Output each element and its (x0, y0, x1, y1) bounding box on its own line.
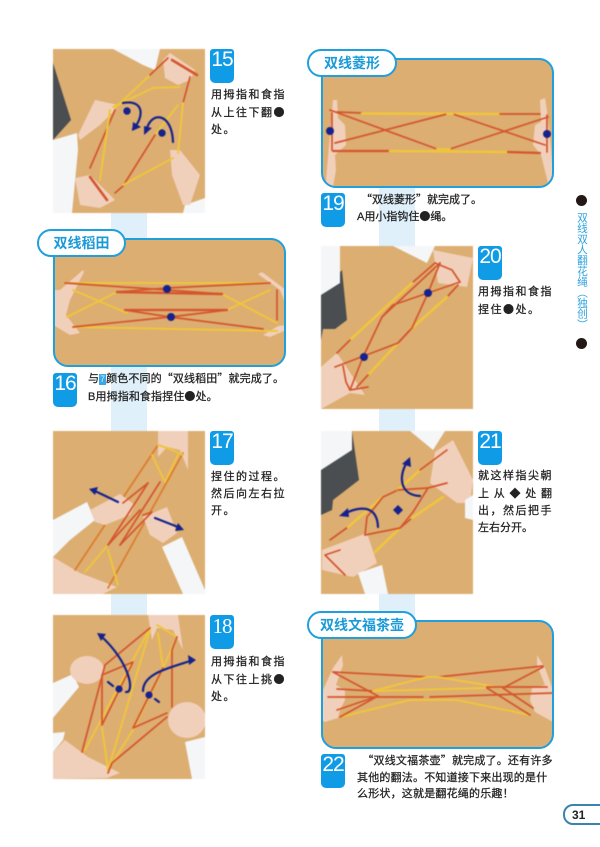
step 16 number (53, 373, 77, 407)
panel: double teapot (321, 620, 554, 749)
label: 双线菱形 (307, 49, 397, 77)
dots (326, 127, 551, 138)
photo: step 21 (321, 431, 473, 594)
step 22 number: 22 (322, 753, 344, 776)
arrows (89, 487, 184, 531)
panel: double diamond (321, 58, 554, 188)
step 15 text: 用拇指和食指 从上往下翻● 处。 (211, 89, 286, 136)
label: 双线文福茶壶 (307, 611, 417, 639)
step 18 text: 用拇指和食指 从下往上挑● 处。 (211, 656, 286, 703)
photo: step 17 (53, 431, 205, 594)
dots (163, 285, 175, 321)
page number (563, 804, 600, 825)
step 18 number: 18 (212, 614, 232, 638)
arrows and diamond (339, 457, 420, 527)
dots (360, 289, 432, 361)
step 21 text: 就这样指尖朝 上 从 ◆ 处 翻 出，然后把手 左右分开。 (478, 470, 553, 534)
step 16 number: 16 (54, 372, 76, 395)
step 21 number (478, 431, 502, 465)
step 19 number: 19 (322, 192, 344, 215)
step 19 number (321, 193, 345, 227)
arrows and dots (97, 633, 196, 702)
photo: step 15 (53, 49, 205, 213)
step 18 number (210, 615, 234, 649)
arrows and dots (123, 102, 173, 142)
step 20 number (478, 246, 502, 280)
label: 双线文福茶壶: 双线文福茶壶 (320, 617, 404, 633)
side tab: chapter title: 双线双人翻花绳（独创） (575, 212, 590, 330)
step 15 number (210, 49, 234, 83)
step 22 number (321, 754, 345, 788)
step 16 text: 7 (100, 374, 105, 384)
label: 双线稻田 (37, 229, 126, 257)
step 16 text: 与 颜色不同的“双线稻田”就完成了。 B用拇指和食指捏住●处。 (88, 370, 284, 404)
step 17 text: 捏住的过程。 然后向左右拉 开。 (211, 471, 286, 517)
label: 双线稻田: 双线稻田 (54, 235, 110, 251)
photo: step 18 (53, 615, 205, 779)
page number: 31 (572, 808, 585, 822)
step 17 number (210, 431, 234, 465)
step 19 text line 2: A用小指钩住●绳。 (357, 208, 452, 224)
step 21 number: 21 (479, 430, 501, 453)
step 22 text: “双线文福茶壶”就完成了。还有许多 其他的翻法。不知道接下来出现的是什 么形状，这就是翻花绳的乐趣！ (357, 752, 553, 800)
label: 双线菱形: 双线菱形 (324, 55, 380, 71)
step 17 number: 17 (211, 430, 233, 453)
step 19 text: “双线菱形”就完成了。 (361, 191, 482, 207)
photo: step 20 (321, 246, 473, 409)
step 20 text: 用拇指和食指 捏住●处。 (478, 286, 553, 317)
step 15 number: 15 (211, 48, 233, 71)
step 20 number: 20 (479, 245, 501, 268)
panel: double rice field (53, 238, 286, 367)
